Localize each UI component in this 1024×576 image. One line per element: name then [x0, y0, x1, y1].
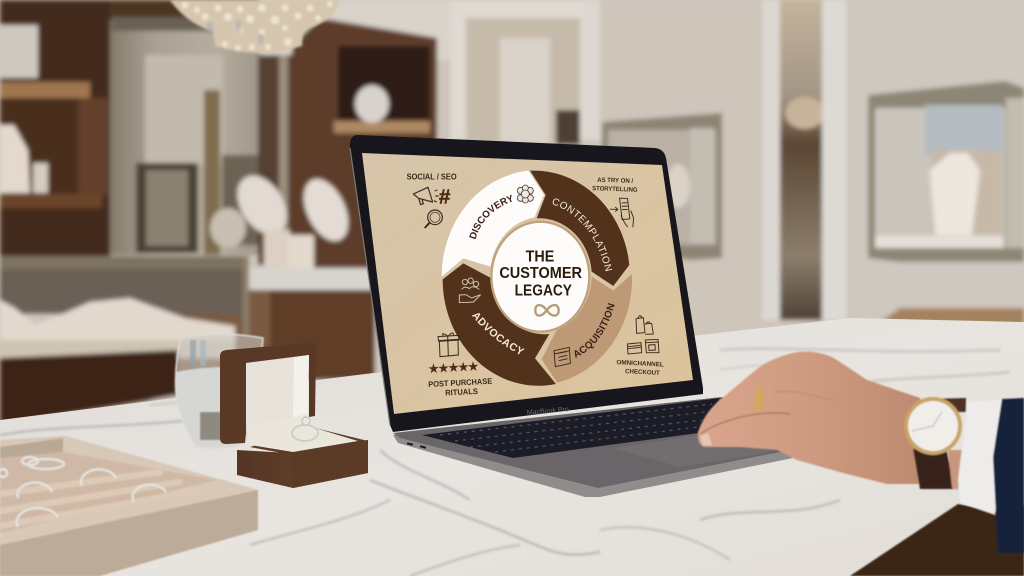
watch face	[904, 397, 962, 455]
segment: contemplation: CONTEMPLATION	[552, 198, 612, 272]
icon: brain	[517, 185, 533, 203]
chandelier	[170, 0, 340, 53]
right wall pillars	[762, 0, 1024, 320]
central display busts	[210, 167, 357, 269]
rings	[0, 457, 166, 527]
trackpad	[613, 435, 773, 467]
label: post purchase rituals: POST PURCHASE	[428, 377, 493, 389]
label: try on: AS TRY ON /	[597, 177, 633, 185]
dark wood below counter	[850, 504, 1024, 576]
left wooden shelving	[0, 0, 110, 262]
segment: advocacy: ADVOCACY	[472, 313, 525, 354]
wooden chair back	[880, 308, 1024, 326]
label: omnichannel checkout	[616, 316, 664, 377]
hand	[698, 352, 925, 484]
jacket sleeve	[993, 398, 1024, 553]
icon: infinity	[535, 305, 559, 316]
keyboard	[422, 398, 720, 458]
icon: magnifier	[425, 210, 442, 228]
ring rolls	[0, 472, 203, 526]
center circle: LEGACY	[515, 282, 572, 299]
screen	[362, 153, 693, 414]
back counter	[165, 268, 375, 380]
label: omnichannel checkout: CHECKOUT	[625, 368, 660, 377]
wedding ring	[753, 387, 765, 413]
icon: hash: #	[439, 185, 451, 208]
MacBook Pro label: MacBook Pro	[527, 406, 569, 417]
water glass	[176, 334, 263, 448]
mirror and cabinet	[110, 0, 437, 270]
doorway	[450, 0, 600, 145]
segment: contemplation	[530, 170, 630, 286]
segment: discovery: DISCOVERY	[469, 194, 512, 240]
label: try on: STORYTELLING	[592, 185, 638, 194]
lid lining	[246, 355, 309, 426]
segment: advocacy	[442, 263, 556, 386]
laptop lid	[350, 135, 703, 432]
label: post purchase rituals: RITUALS	[445, 387, 479, 398]
ring box	[220, 343, 368, 488]
velvet ring tray	[0, 436, 258, 576]
icon: calendar	[554, 347, 570, 367]
label: social / seo	[407, 172, 457, 228]
icon: hand holding phone	[609, 198, 634, 227]
cushion	[246, 414, 358, 452]
label: omnichannel checkout: OMNICHANNEL	[616, 359, 664, 369]
center circle: CUSTOMER	[499, 265, 582, 282]
background: boutique interior	[0, 0, 1024, 425]
icon: people on open hand	[459, 278, 481, 303]
label: post purchase rituals	[427, 333, 493, 398]
watch strap	[925, 398, 966, 412]
wall display case 1	[602, 113, 722, 260]
box lid	[220, 343, 316, 444]
icon: megaphone	[413, 187, 439, 205]
box base	[237, 440, 368, 488]
icon: credit card	[627, 343, 642, 354]
label: social / seo: SOCIAL / SEO	[407, 172, 457, 181]
center circle: THE	[526, 248, 555, 265]
wall display case 2	[868, 81, 1024, 262]
icon: five stars: ★★★★★	[427, 360, 480, 377]
customer legacy wheel	[406, 170, 664, 398]
icon: register	[645, 339, 659, 353]
ring	[292, 417, 318, 441]
segment: acquisition: ACQUISITION	[574, 303, 615, 358]
hand with wedding ring and watch	[698, 352, 1024, 553]
label: try on	[591, 177, 638, 227]
segment: acquisition	[542, 274, 632, 382]
laptop base	[393, 397, 793, 497]
icon: shopping bags	[636, 316, 653, 334]
center circle	[491, 222, 589, 332]
marble counter	[0, 318, 1024, 576]
front glass display case	[0, 256, 249, 425]
shirt cuff	[958, 400, 1002, 515]
USB-C ports	[407, 442, 426, 449]
segment: discovery	[442, 170, 544, 276]
icon: gift box	[438, 333, 459, 357]
